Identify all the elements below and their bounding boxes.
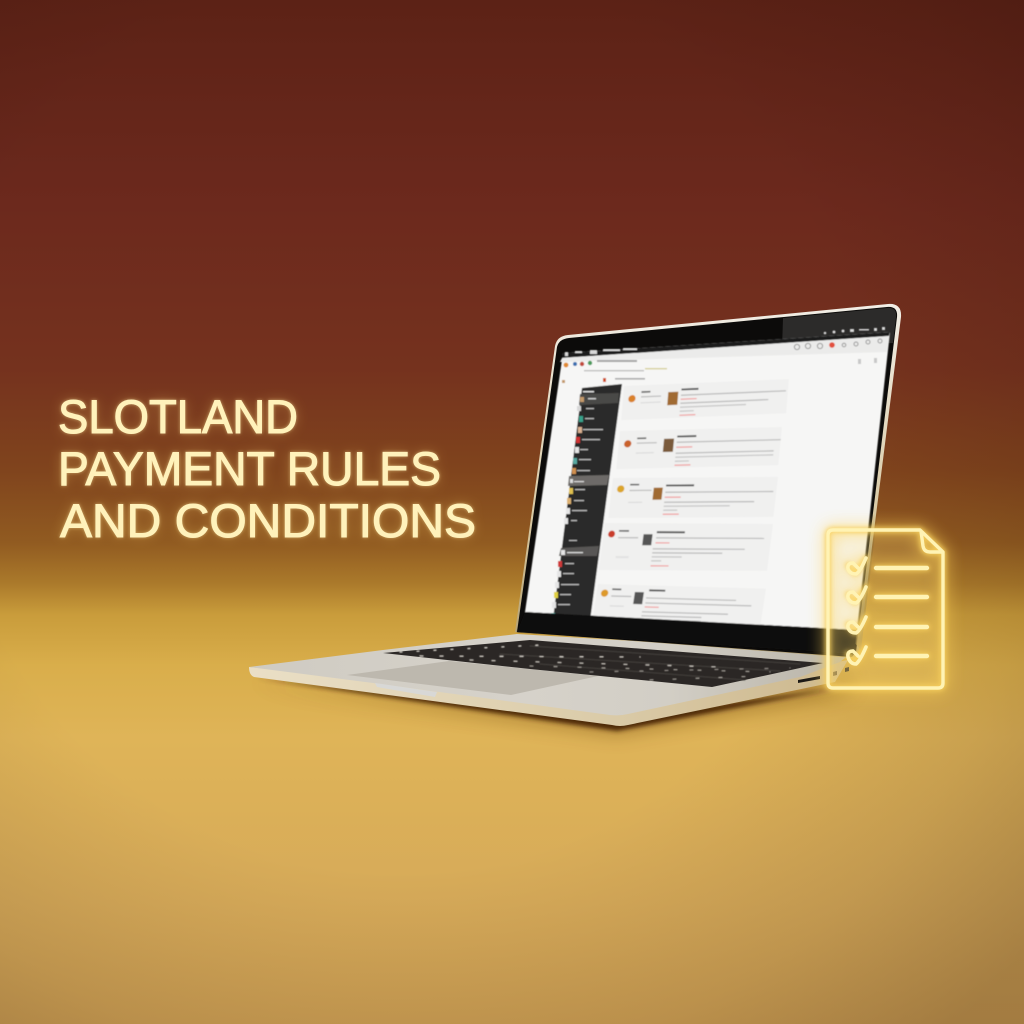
title: PAYMENT RULES xyxy=(58,442,441,495)
laptop xyxy=(249,304,901,734)
title: SLOTLAND xyxy=(58,390,298,443)
glowing checklist document icon xyxy=(828,530,943,688)
title: AND CONDITIONS xyxy=(60,494,476,547)
checklist lines xyxy=(876,568,927,656)
lid silver rim xyxy=(515,304,901,658)
screen bottom mask xyxy=(517,612,857,654)
title: AND CONDITIONS xyxy=(60,494,476,547)
laptop base xyxy=(249,634,850,726)
keyboard xyxy=(383,640,823,687)
post card 5 xyxy=(592,584,766,629)
document outline xyxy=(828,530,943,688)
dark sidebar xyxy=(551,384,622,621)
title: AND CONDITIONS xyxy=(60,494,476,547)
post card 2 xyxy=(616,427,782,469)
trackpad xyxy=(347,661,598,695)
post card 4 xyxy=(599,523,773,571)
title: SLOTLAND xyxy=(58,390,298,443)
title: SLOTLAND xyxy=(58,390,298,443)
bezel reflection xyxy=(782,308,896,349)
title: PAYMENT RULES xyxy=(58,442,441,495)
browser tabs row xyxy=(562,358,877,383)
browser toolbar xyxy=(560,336,889,362)
screen xyxy=(517,327,890,654)
os menu bar xyxy=(562,327,890,358)
thumb notch xyxy=(375,683,437,697)
post card 1 xyxy=(621,379,789,420)
title: PAYMENT RULES xyxy=(58,442,441,495)
post card 3 xyxy=(608,477,778,518)
side ports xyxy=(798,667,849,683)
laptop lid xyxy=(515,304,901,658)
laptop shadow on floor xyxy=(250,676,850,734)
lower right lid reflection xyxy=(852,510,878,650)
checkmarks xyxy=(848,558,866,664)
lid black bezel xyxy=(517,307,897,657)
title xyxy=(58,390,476,547)
